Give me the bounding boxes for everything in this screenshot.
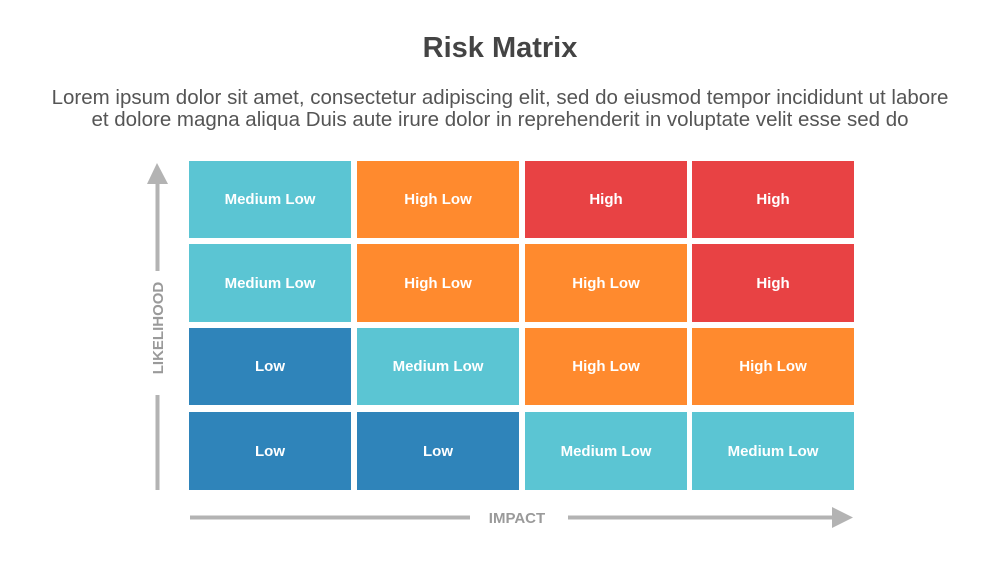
row 3 bbox=[189, 328, 351, 405]
row 2: Medium Low bbox=[225, 274, 315, 292]
matrix grid bbox=[189, 161, 854, 490]
matrix grid: High Low bbox=[572, 274, 640, 292]
title: Risk Matrix bbox=[423, 32, 577, 64]
matrix grid: High bbox=[589, 191, 623, 208]
row 3: Low bbox=[255, 358, 285, 375]
matrix grid: Medium Low bbox=[561, 442, 651, 460]
subtitle text: Lorem ipsum dolor sit amet, consectetur adipiscing elit, sed do eiusmod tempor incididunt ut labore bbox=[52, 86, 948, 109]
matrix grid: High bbox=[756, 274, 790, 292]
matrix grid: High Low bbox=[404, 191, 472, 208]
arrow: impact axis bbox=[190, 507, 853, 528]
row 1 bbox=[189, 161, 351, 238]
row 2 bbox=[189, 244, 351, 322]
row 4: Low bbox=[255, 442, 285, 460]
matrix grid: Medium Low bbox=[393, 358, 483, 375]
matrix grid: High Low bbox=[739, 358, 807, 375]
arrow: likelihood axis: LIKELIHOOD bbox=[150, 282, 167, 374]
subtitle text: et dolore magna aliqua Duis aute irure dolor in reprehenderit in voluptate velit esse sed do bbox=[91, 108, 909, 131]
matrix grid: High Low bbox=[572, 358, 640, 375]
matrix grid: High Low bbox=[404, 274, 472, 292]
row 4 bbox=[189, 412, 351, 490]
matrix grid: Medium Low bbox=[728, 442, 818, 460]
matrix grid: High bbox=[756, 191, 790, 208]
row 1: Medium Low bbox=[225, 191, 315, 208]
arrow: likelihood axis bbox=[147, 163, 168, 490]
arrow: impact axis: IMPACT bbox=[489, 510, 545, 527]
matrix grid: Low bbox=[423, 442, 453, 460]
subtitle text bbox=[52, 86, 948, 131]
